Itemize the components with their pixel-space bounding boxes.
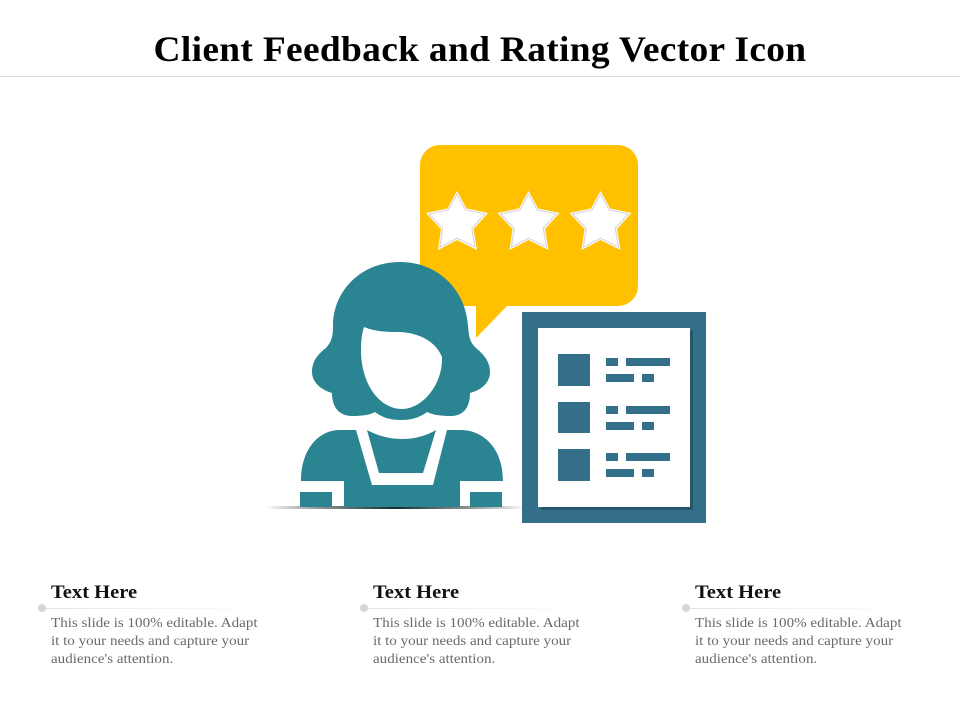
collar centre: [367, 430, 436, 473]
icon: client person: [300, 262, 503, 507]
icon: star 1: [426, 191, 488, 250]
icon: speech bubble with stars: [420, 145, 638, 338]
right cuff: [470, 492, 502, 507]
title: Client Feedback and Rating Vector Icon: [154, 29, 806, 69]
text block 3: Text Here: [695, 582, 781, 602]
text block 1: it to your needs and capture your: [51, 633, 249, 648]
hair: [312, 262, 490, 420]
text block 1: [38, 582, 258, 666]
text block 1: audience's attention.: [51, 651, 173, 666]
text block 3: it to your needs and capture your: [695, 633, 893, 648]
row 1: [558, 354, 670, 386]
icon: star 2: [498, 191, 560, 250]
icon: star 3: [570, 191, 632, 250]
ground shadow: [265, 506, 525, 509]
body: [301, 430, 503, 507]
left cuff: [300, 492, 332, 507]
row 2: [558, 402, 670, 433]
text block 3: This slide is 100% editable. Adapt: [695, 614, 902, 630]
icon: checklist panel: [522, 312, 706, 523]
text block 1: Text Here: [51, 582, 137, 602]
text block 2: This slide is 100% editable. Adapt: [373, 614, 580, 630]
text block 2: [360, 582, 580, 666]
row 3: [558, 449, 670, 481]
text block 2: audience's attention.: [373, 651, 495, 666]
text block 2: it to your needs and capture your: [373, 633, 571, 648]
text block 1: This slide is 100% editable. Adapt: [51, 614, 258, 630]
text block 3: [682, 582, 902, 666]
text block 3: audience's attention.: [695, 651, 817, 666]
text block 2: Text Here: [373, 582, 459, 602]
